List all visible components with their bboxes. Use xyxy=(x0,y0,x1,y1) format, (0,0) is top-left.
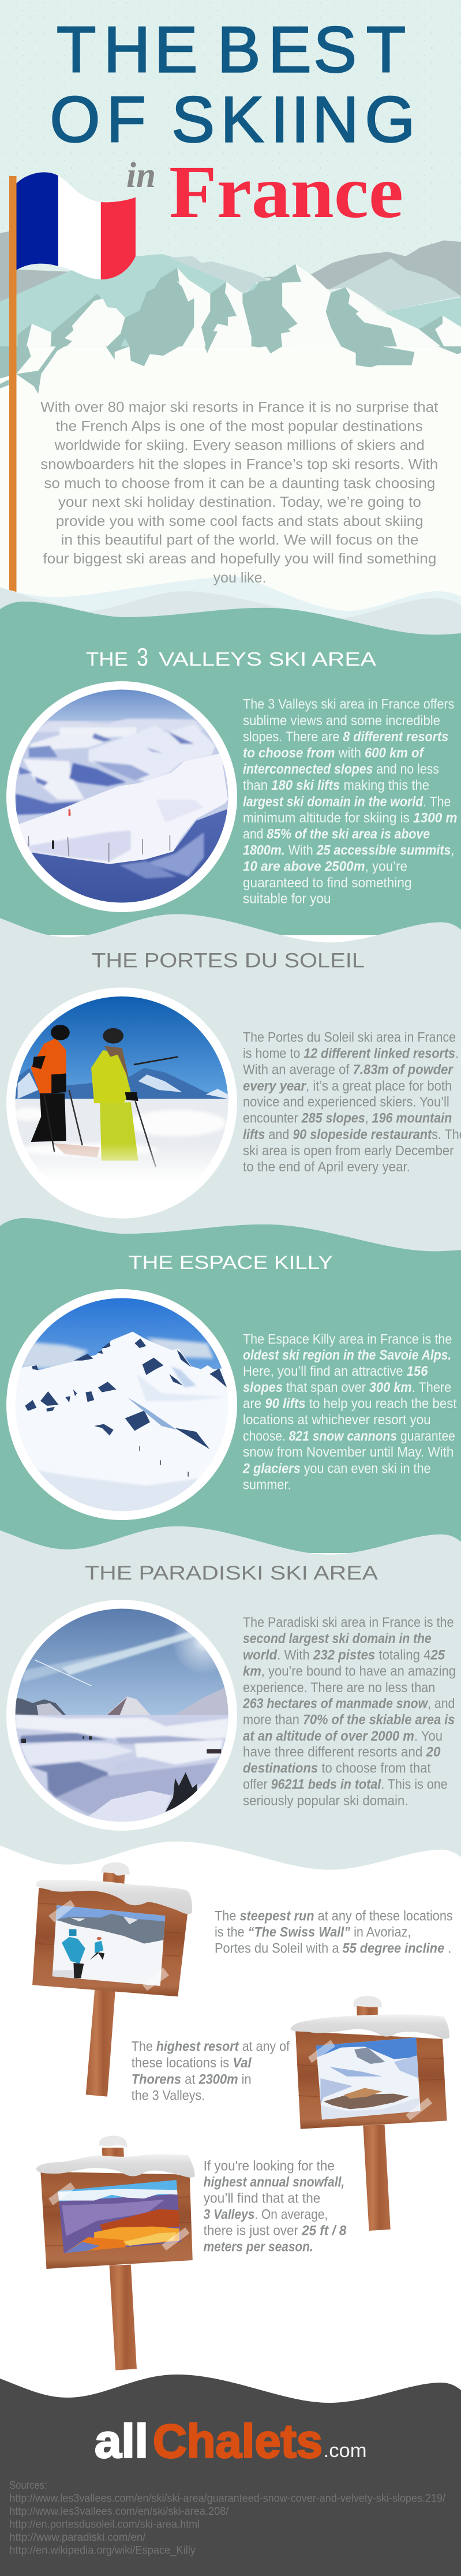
text: Paradiski facts: seriously popular ski domain. xyxy=(243,1793,408,1809)
text: highest resort xyxy=(132,2039,290,2103)
text: steepest run: The steepest run at any of these locations xyxy=(215,1909,453,1924)
text: Paradiski facts: offer 96211 beds in total. This is one xyxy=(243,1777,448,1793)
text: Portes du Soleil facts xyxy=(243,1030,461,1175)
text: highest annual snowfall: you’ll find that at the xyxy=(204,2190,321,2206)
panel: intro paragraph: snowboarders hit the slopes in France’s top ski resorts. With xyxy=(40,456,438,472)
text: Portes du Soleil facts: encounter 285 slopes, 196 mountain xyxy=(243,1111,452,1126)
text: Paradiski facts xyxy=(242,1615,456,1809)
photo: chalets at dusk xyxy=(56,2179,182,2254)
panel: white signs section background xyxy=(0,1842,461,2396)
text: highest annual snowfall: 3 Valleys. On average, xyxy=(204,2207,328,2223)
text: steepest run: Portes du Soleil with a 55 degree incline . xyxy=(215,1941,451,1957)
text: 3 Valleys facts: minimum altitude for skiing is 1300 m xyxy=(243,810,457,826)
text: 3 Valleys facts: 1800m. With 25 accessible summits, xyxy=(243,843,454,858)
text: 3 Valleys facts: and 85% of the ski area is above xyxy=(243,827,430,842)
photo: two skiers above the clouds xyxy=(6,987,237,1218)
panel: Espace Killy section background xyxy=(0,1218,461,1553)
photo: Val Thorens xyxy=(314,2037,422,2120)
panel: intro paragraph: so much to choose from it can be a daunting task choosing xyxy=(44,475,435,491)
logo: allChalets.com xyxy=(95,2416,367,2467)
heading: The Paradiski ski area: THE PARADISKI SKI AREA xyxy=(85,1562,378,1584)
panel: intro paragraph: four biggest ski areas and hopefully you will find something xyxy=(43,551,436,567)
text: highest resort: Thorens at 2300m in xyxy=(132,2071,252,2087)
panel: intro paragraph xyxy=(40,400,438,586)
text: sources: http://en.portesdusoleil.com/ski-area.html xyxy=(9,2519,200,2531)
icon: French flag xyxy=(17,172,136,279)
panel: Portes du Soleil section background xyxy=(0,914,461,1259)
text: Espace Killy facts: summer. xyxy=(243,1477,291,1493)
text: highest annual snowfall: If you're looking for the xyxy=(204,2158,335,2174)
text: Portes du Soleil facts: With an average of 7.83m of powder xyxy=(243,1062,453,1077)
text: Paradiski facts: experience. There are no less than xyxy=(243,1680,435,1696)
panel: 3 Valleys section background xyxy=(0,602,461,935)
panel: Paradiski section background xyxy=(0,1526,461,1871)
panel: intro paragraph: your next ski holiday destination. Today, we’re going to xyxy=(58,494,421,510)
mountain range illustration xyxy=(0,230,461,346)
logo: allChalets.com: Chalets xyxy=(153,2416,323,2467)
text: Espace Killy facts: 2 glaciers you can even ski in the xyxy=(242,1461,431,1477)
text: highest resort: the 3 Valleys. xyxy=(132,2088,205,2103)
photo: Espace Killy peak xyxy=(6,1289,237,1520)
text: Espace Killy facts xyxy=(242,1331,457,1493)
panel: header xyxy=(0,0,461,641)
text: highest resort: these locations is Val xyxy=(132,2055,252,2071)
skier in orange xyxy=(31,1025,83,1152)
text: steepest run xyxy=(215,1909,453,1957)
text: Paradiski facts: world. With 232 pistes totaling 425 xyxy=(243,1648,445,1663)
text: Portes du Soleil facts: to the end of April every year. xyxy=(243,1159,410,1175)
text: sources: http://www.paradiski.com/en/ xyxy=(9,2532,146,2544)
text: sources: http://en.wikipedia.org/wiki/Espace_Killy xyxy=(9,2544,196,2556)
subtitle: in France: in xyxy=(126,156,156,195)
text: highest annual snowfall: meters per season. xyxy=(204,2239,313,2254)
sign: highest annual snowfall xyxy=(36,2136,195,2370)
text: steepest run: is the “The Swiss Wall” in Avoriaz, xyxy=(215,1924,411,1940)
text: Paradiski facts: second largest ski domain in the xyxy=(243,1631,432,1647)
sign: highest resort xyxy=(290,1996,449,2231)
text: sources: Sources: xyxy=(9,2480,47,2492)
text: highest annual snowfall: there is just over 25 ft / 8 xyxy=(204,2223,347,2239)
heading: The 3 Valleys ski area xyxy=(86,643,376,671)
heading: The 3 Valleys ski area: VALLEYS SKI AREA xyxy=(159,648,376,670)
heading: The 3 Valleys ski area: 3 xyxy=(137,643,148,671)
panel: intro paragraph: provide you with some cool facts and stats about skiing xyxy=(56,513,423,529)
text: Paradiski facts: 263 hectares of manmade snow, and xyxy=(242,1696,455,1712)
snow drift waves xyxy=(0,576,461,656)
text: 3 Valleys facts: suitable for you xyxy=(243,891,331,907)
text: highest annual snowfall xyxy=(204,2158,347,2254)
logo: allChalets.com: .com xyxy=(324,2440,367,2462)
sign: steepest run xyxy=(32,1862,192,2097)
text: 3 Valleys facts: interconnected slopes and no less xyxy=(243,761,439,777)
panel: footer background xyxy=(0,2375,461,2576)
text: 3 Valleys facts: slopes. There are 8 different resorts xyxy=(243,729,448,745)
text: 3 Valleys facts: largest ski domain in the world. The xyxy=(243,794,451,809)
text: 3 Valleys facts: to choose from with 600 km of xyxy=(243,745,425,761)
title: OF SKIING xyxy=(50,83,415,156)
text: sources: http://www.les3vallees.com/en/ski/ski-area/guaranteed-snow-cover-and-velvety-ski-slopes.219/ xyxy=(9,2492,446,2504)
panel: intro paragraph: you like. xyxy=(213,570,267,586)
text: Paradiski facts: at an altitude of over 2000 m. You xyxy=(243,1728,443,1744)
mountain shadows below snowline xyxy=(0,346,461,394)
heading: The 3 Valleys ski area: THE xyxy=(86,648,128,670)
text: Espace Killy facts: Here, you’ll find an attractive 156 xyxy=(243,1364,428,1379)
panel: intro paragraph: in this beautiful part of the world. We will focus on the xyxy=(61,532,419,548)
text: Paradiski facts: destinations to choose from that xyxy=(243,1760,431,1776)
heading: The Portes du Soleil: THE PORTES DU SOLEIL xyxy=(92,950,365,972)
panel: intro paragraph: With over 80 major ski resorts in France it is no surprise that xyxy=(40,400,438,416)
text: Espace Killy facts: choose. 821 snow cannons guarantee xyxy=(243,1428,455,1444)
panel: intro paragraph: the French Alps is one of the most popular destinations xyxy=(56,419,423,435)
text: 3 Valleys facts: 10 are above 2500m, you’re xyxy=(243,859,407,874)
skier in yellow xyxy=(91,1028,178,1167)
text: Espace Killy facts: slopes that span over 300 km. There xyxy=(243,1380,451,1395)
heading: The Espace Killy: THE ESPACE KILLY xyxy=(129,1252,333,1273)
subtitle: in France: France xyxy=(169,151,403,234)
text: 3 Valleys facts: guaranteed to find something xyxy=(243,875,412,891)
text: 3 Valleys facts: sublime views and some incredible xyxy=(243,713,440,729)
photo: skiers on slope xyxy=(50,1903,167,1988)
photo: Paradiski valley xyxy=(6,1600,237,1831)
title: THE BEST xyxy=(57,14,406,85)
photo: 3 Valleys snowy mountains xyxy=(6,681,237,912)
text: Portes du Soleil facts: every year, it’s a great place for both xyxy=(243,1078,452,1094)
text: Paradiski facts: have three different resorts and 20 xyxy=(243,1745,441,1760)
logo: allChalets.com: all xyxy=(95,2416,148,2467)
flagpole xyxy=(9,176,16,592)
text: highest annual snowfall: highest annual snowfall, xyxy=(204,2174,344,2190)
text: Espace Killy facts: locations at whichever resort you xyxy=(243,1412,431,1428)
text: sources xyxy=(9,2480,446,2556)
text: 3 Valleys facts xyxy=(243,697,457,907)
panel: intro paragraph: worldwide for skiing. Every season millions of skiers and xyxy=(54,438,425,454)
text: sources: http://www.les3vallees.com/en/ski/ski-area.208/ xyxy=(9,2506,229,2518)
title xyxy=(50,14,415,156)
text: highest resort: The highest resort at any of xyxy=(132,2039,290,2055)
text: 3 Valleys facts: than 180 ski lifts making this the xyxy=(243,778,429,793)
